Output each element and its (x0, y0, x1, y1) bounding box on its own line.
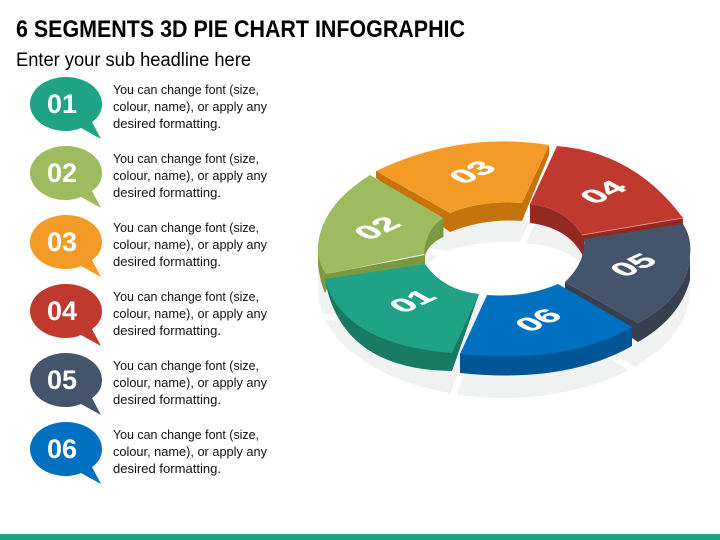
list item 04 (30, 284, 268, 346)
number 05: 05 (47, 365, 77, 395)
list item 01 (30, 77, 268, 139)
description 01 (113, 83, 268, 131)
list item 05 (30, 353, 268, 415)
speech bubble 04 (30, 284, 102, 346)
number 02: 02 (47, 158, 77, 188)
label 01: 01 (381, 285, 444, 317)
bottom bar (0, 534, 720, 540)
description 01: colour, name), or apply any (113, 100, 268, 114)
segment 02 (318, 175, 444, 293)
segment 04 (530, 146, 683, 258)
description 01: You can change font (size, (113, 83, 259, 97)
description 03: You can change font (size, (113, 221, 259, 235)
number 01: 01 (47, 89, 77, 119)
label 05: 05 (602, 249, 665, 281)
title: 6 SEGMENTS 3D PIE CHART INFOGRAPHIC (16, 16, 465, 43)
speech bubble 06 (30, 422, 102, 484)
label 04: 04 (572, 176, 635, 208)
description 02: You can change font (size, (113, 152, 259, 166)
list item 03 (30, 215, 268, 277)
number 04: 04 (47, 296, 77, 326)
segment 06 (460, 284, 632, 375)
description 05: desired formatting. (113, 393, 221, 407)
list item 06 (30, 422, 268, 484)
speech bubble 01 (30, 77, 102, 139)
label 02: 02 (346, 212, 409, 244)
description 03 (113, 221, 268, 269)
description 06: colour, name), or apply any (113, 445, 268, 459)
description 04: desired formatting. (113, 324, 221, 338)
description 01: desired formatting. (113, 117, 221, 131)
list item 02 (30, 146, 268, 208)
description 02 (113, 152, 268, 200)
label 06: 06 (507, 304, 570, 336)
number 06: 06 (47, 434, 77, 464)
label 03: 03 (441, 156, 504, 188)
speech bubble 02 (30, 146, 102, 208)
speech bubble 03 (30, 215, 102, 277)
floor shadow ring (316, 217, 690, 398)
description 02: colour, name), or apply any (113, 169, 268, 183)
description 06: You can change font (size, (113, 428, 259, 442)
speech bubble 05 (30, 353, 102, 415)
3D pie chart (316, 141, 690, 398)
segment 01 (325, 264, 479, 371)
subtitle: Enter your sub headline here (16, 50, 251, 71)
number 03: 03 (47, 227, 77, 257)
description 03: colour, name), or apply any (113, 238, 268, 252)
description 03: desired formatting. (113, 255, 221, 269)
description 05: colour, name), or apply any (113, 376, 268, 390)
description 06: desired formatting. (113, 462, 221, 476)
description 05 (113, 359, 268, 407)
description 04 (113, 290, 268, 338)
description 04: colour, name), or apply any (113, 307, 268, 321)
segment 05 (565, 224, 690, 342)
description 06 (113, 428, 268, 476)
description 04: You can change font (size, (113, 290, 259, 304)
description 02: desired formatting. (113, 186, 221, 200)
description 05: You can change font (size, (113, 359, 259, 373)
segment 03 (376, 141, 549, 232)
